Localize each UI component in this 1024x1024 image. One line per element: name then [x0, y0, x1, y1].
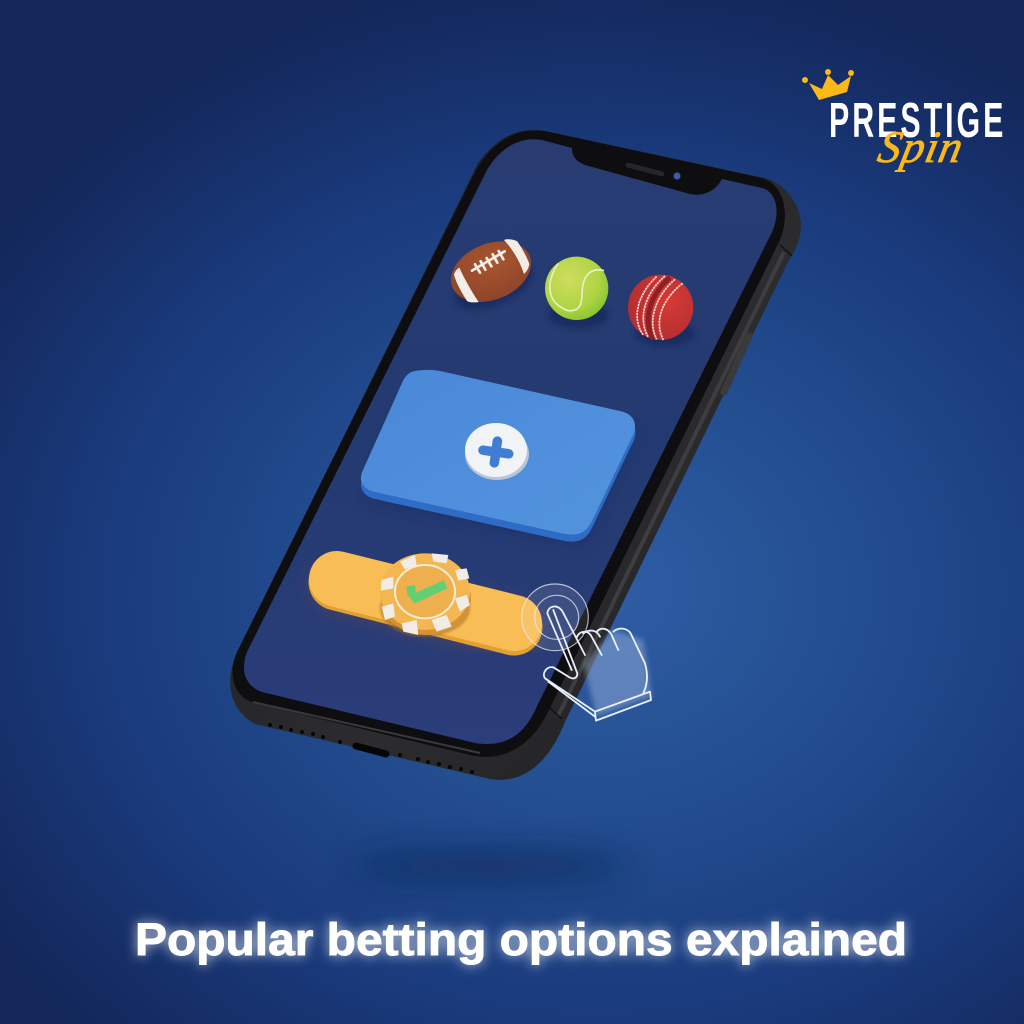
blue card [361, 370, 635, 545]
icon: tennis ball [545, 257, 608, 328]
brand script: Spin [874, 121, 969, 172]
chip shadow [380, 580, 470, 637]
poker chip with check [380, 553, 471, 637]
hand outline [544, 606, 651, 721]
tap ripples [522, 584, 588, 651]
pill top [337, 579, 514, 623]
hand glow [583, 630, 652, 717]
icon: cricket ball [628, 275, 695, 346]
card shadow [365, 385, 630, 545]
logo [802, 69, 1006, 172]
plus button [465, 423, 529, 480]
chip ring [395, 565, 455, 618]
card top [361, 370, 635, 535]
top antenna line [550, 245, 792, 719]
card side [361, 373, 635, 542]
charging port [356, 746, 386, 754]
volume button [724, 336, 749, 392]
screen [244, 139, 777, 744]
speaker [628, 165, 662, 174]
phone ground shadow [350, 853, 630, 879]
pill glow [338, 584, 513, 630]
chip notches [381, 553, 470, 635]
chip top [380, 553, 470, 630]
yellow bet pill [337, 579, 514, 630]
brand name: PRESTIGE [829, 93, 1006, 148]
speaker holes [268, 723, 474, 774]
front bezel [233, 131, 785, 757]
camera [674, 172, 680, 180]
icon: tapping hand [522, 584, 652, 721]
phone body [230, 130, 801, 780]
check mark [407, 580, 447, 603]
crown [802, 69, 854, 100]
chip body [381, 562, 471, 635]
icon: american football [442, 230, 540, 319]
phone [230, 130, 801, 780]
title [135, 914, 907, 965]
bezel lower highlight [253, 702, 480, 753]
title glow: Popular betting options explained [135, 914, 907, 965]
side edge highlight [558, 252, 784, 716]
pill side [337, 582, 514, 627]
title text: Popular betting options explained [135, 914, 907, 965]
